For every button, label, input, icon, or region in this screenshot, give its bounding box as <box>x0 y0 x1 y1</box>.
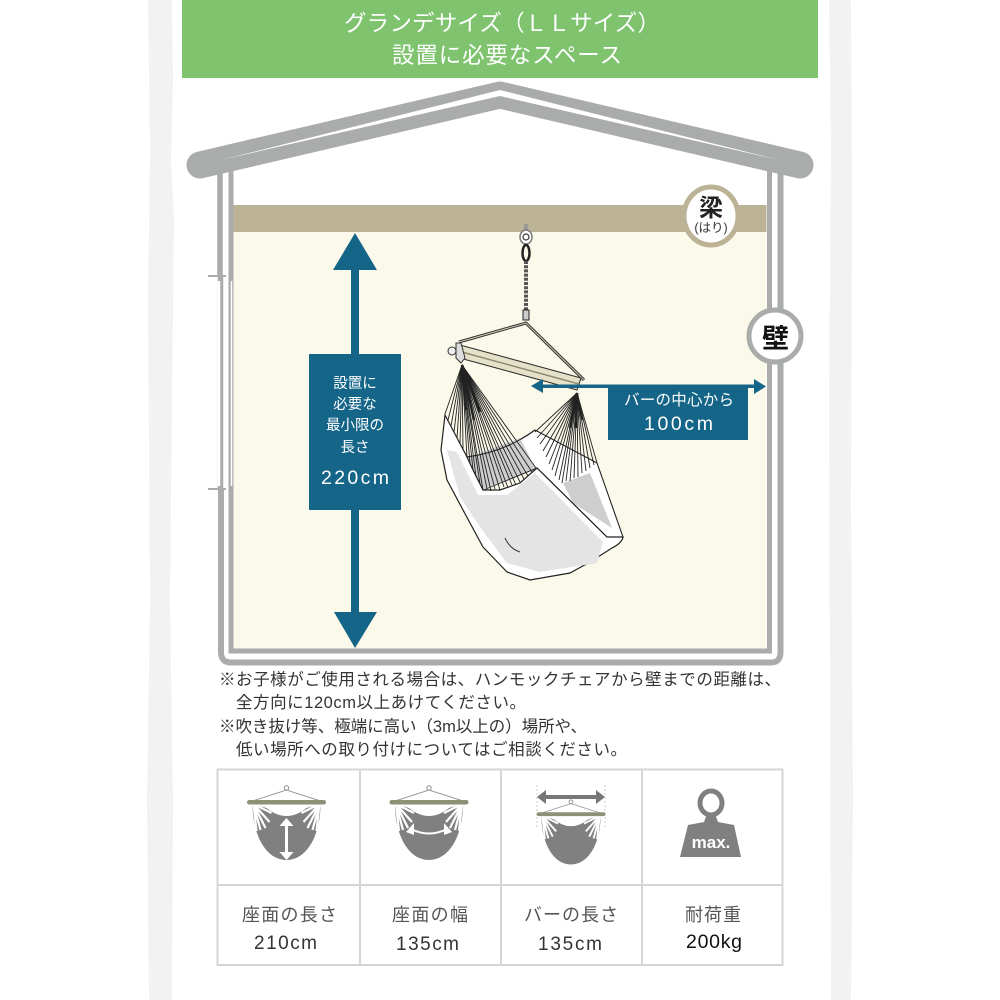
specification table <box>217 769 783 965</box>
distance to wall arrow: バーの中心から <box>624 391 734 409</box>
icon: max weight <box>680 791 741 857</box>
hook and rope <box>520 224 532 320</box>
title banner: グランデサイズ（ＬＬサイズ） <box>344 11 660 36</box>
distance to wall arrow: 100cm <box>644 413 713 435</box>
back of seat <box>467 430 623 537</box>
front of seat <box>441 415 623 580</box>
icon: seat length <box>247 786 326 860</box>
spec: seat width <box>392 905 468 955</box>
notes: ※吹き抜け等、極端に高い（3m以上の）場所や、 <box>219 717 587 736</box>
notes: 低い場所への取り付けについてはご相談ください。 <box>236 740 627 759</box>
notes: ※お子様がご使用される場合は、ハンモックチェアから壁までの距離は、 <box>219 670 781 689</box>
room wall area <box>234 232 766 648</box>
icon: seat width <box>390 786 468 860</box>
icon: max weight: max. <box>692 833 730 852</box>
spec: bar length <box>524 905 618 955</box>
beam label: 梁: 梁 <box>699 195 723 222</box>
suspension ropes and spreader bar <box>459 323 584 380</box>
spec: bar length: バーの長さ <box>524 905 618 925</box>
height arrow <box>309 233 401 648</box>
icon: bar length <box>537 785 605 864</box>
beam label: 梁 <box>684 187 738 245</box>
title banner <box>182 0 818 78</box>
spec: seat length <box>242 905 337 954</box>
spec: bar length: 135cm <box>538 934 602 955</box>
spec: seat length: 210cm <box>254 933 317 954</box>
hammock strings: left fan <box>445 365 536 491</box>
title banner: 設置に必要なスペース <box>392 43 622 68</box>
spec: load capacity <box>685 905 742 953</box>
distance to wall arrow <box>531 379 766 440</box>
beam label: 梁: (はり) <box>694 221 728 235</box>
spec: seat width: 135cm <box>396 934 459 955</box>
spec: seat length: 座面の長さ <box>242 905 337 925</box>
house outline <box>200 90 800 662</box>
beam <box>234 205 766 232</box>
height arrow: 長さ <box>340 439 370 456</box>
height arrow: 220cm <box>321 467 389 489</box>
notes: 全方向に120cm以上あけてください。 <box>236 693 526 712</box>
height arrow: 設置に <box>333 376 377 392</box>
hammock strings: right fan <box>535 393 597 483</box>
height arrow: 必要な <box>333 396 377 413</box>
notes <box>219 670 781 759</box>
spec: load capacity: 耐荷重 <box>685 905 741 925</box>
wall label: 壁: 壁 <box>762 324 789 354</box>
hammock chair illustration <box>441 224 623 580</box>
height arrow: 最小限の <box>326 417 384 434</box>
wall label: 壁 <box>749 310 801 362</box>
spec: seat width: 座面の幅 <box>392 905 468 925</box>
spec: load capacity: 200kg <box>686 931 742 953</box>
